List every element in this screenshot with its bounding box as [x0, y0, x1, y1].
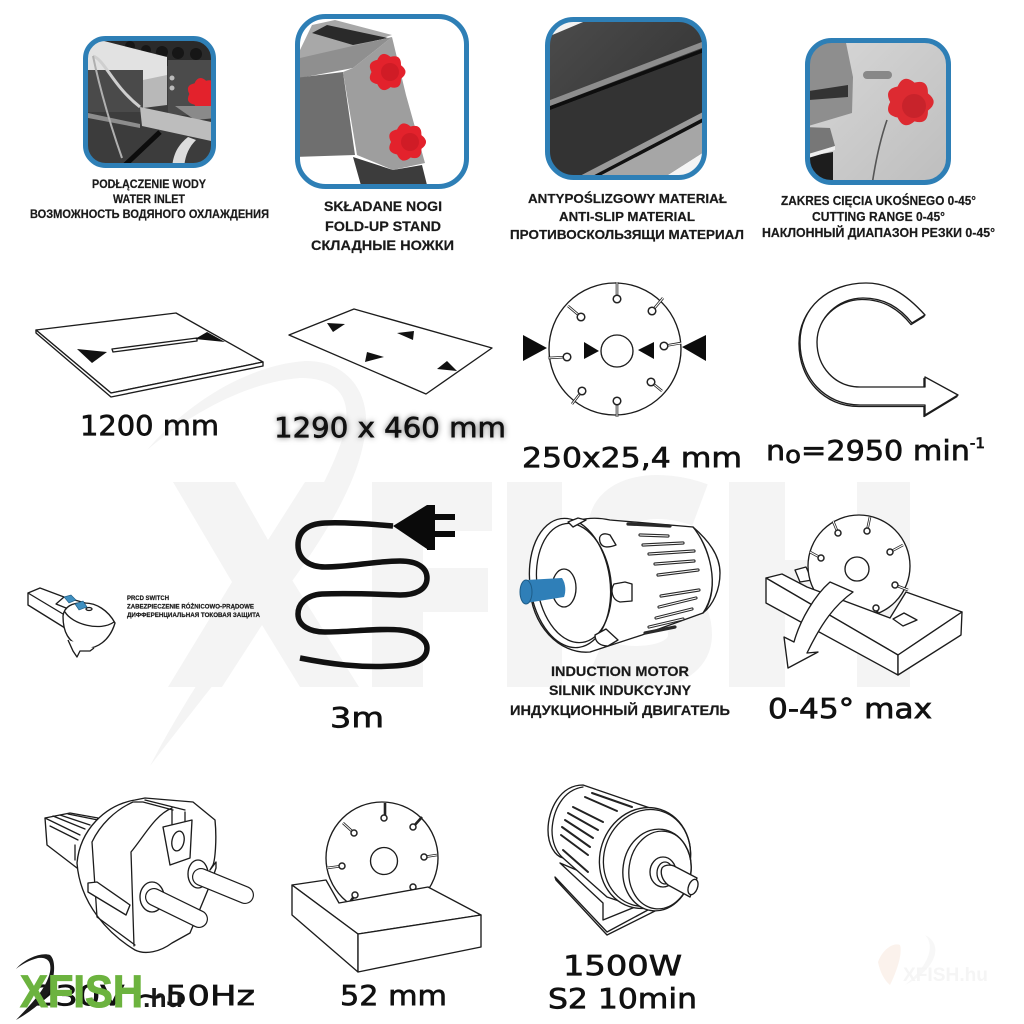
logo: XFISH green: XFISH [20, 966, 143, 1017]
logo: faint XFISH watermark: XFISH.hu [903, 965, 988, 986]
caption: water inlet [30, 179, 269, 221]
label: power rating: 1500W [563, 949, 682, 982]
caption: anti-slip material: ПРОТИВОСКОЛЬЗЯЩИ МАТЕРИАЛ [510, 227, 744, 242]
icon: cutting depth [292, 802, 481, 972]
panel: fold-up stand [295, 14, 469, 253]
icon: plug [45, 798, 245, 952]
icon: cutting length sheet [36, 313, 263, 397]
label: rotation speed: o [785, 441, 801, 469]
caption: induction motor: INDUCTION MOTOR [551, 663, 689, 679]
icon: bevel cut [766, 515, 962, 675]
label: rotation speed: -1 [970, 436, 985, 452]
caption: induction motor [510, 663, 730, 718]
icon: motor power [548, 785, 704, 935]
icon: rotation arrow [799, 283, 958, 416]
photo: water inlet [88, 41, 211, 163]
caption: cutting range: ZAKRES CIĘCIA UKOŚNEGO 0-45° [781, 193, 976, 208]
caption: fold-up stand: SKŁADANE NOGI [324, 198, 442, 214]
caption: PRCD switch: ДИФФЕРЕНЦИАЛЬНАЯ ТОКОВАЯ ЗАЩИТА [127, 612, 260, 619]
caption: PRCD switch [127, 595, 260, 619]
panel: cutting range [762, 38, 995, 240]
icon: blade diameter [523, 281, 706, 418]
icon: PRCD switch [28, 588, 115, 657]
icon: table size sheet [289, 309, 492, 394]
caption: induction motor: ИНДУКЦИОННЫЙ ДВИГАТЕЛЬ [510, 701, 730, 718]
caption: fold-up stand [311, 198, 454, 253]
caption: PRCD switch: PRCD SWITCH [127, 595, 169, 602]
label: rotation speed: =2950 min [801, 434, 970, 467]
photo: fold-up stand [300, 20, 427, 184]
panel: anti-slip material [510, 17, 744, 242]
caption: water inlet: WATER INLET [113, 194, 185, 206]
caption: fold-up stand: FOLD-UP STAND [325, 218, 441, 234]
logo: faint XFISH watermark [878, 935, 988, 986]
icon: induction motor [520, 513, 720, 653]
caption: anti-slip material: ANTYPOŚLIZGOWY MATERIAŁ [528, 191, 727, 206]
label: 1200 mm: 1200 mm [80, 409, 219, 442]
icon: power cord [298, 505, 455, 667]
label: rotation speed: n [766, 434, 784, 467]
caption: fold-up stand: СКЛАДНЫЕ НОЖКИ [311, 237, 454, 253]
label: blade size: 250x25,4 mm [522, 441, 742, 474]
label: voltage: 230V ~50Hz [33, 979, 255, 1012]
caption: cutting range: НАКЛОННЫЙ ДИАПАЗОН РЕЗКИ 0-45° [762, 225, 995, 240]
photo: anti-slip material [550, 22, 702, 175]
label: cord length: 3m [330, 701, 384, 734]
photo: cutting range [810, 43, 946, 180]
label: cut depth: 52 mm [340, 979, 447, 1012]
watermark: XFISH [147, 361, 910, 766]
logo: XFISH green: .hu [143, 983, 183, 1013]
label: power rating [548, 949, 697, 1015]
caption: water inlet: ВОЗМОЖНОСТЬ ВОДЯНОГО ОХЛАЖДЕНИЯ [30, 209, 269, 221]
caption: PRCD switch: ZABEZPIECZENIE RÓŻNICOWO-PRĄDOWE [127, 602, 255, 610]
logo: XFISH green [16, 954, 183, 1020]
label: bevel range: 0-45° max [768, 692, 932, 725]
caption: cutting range [762, 193, 995, 240]
caption: induction motor: SILNIK INDUKCYJNY [549, 682, 692, 698]
caption: anti-slip material [510, 191, 744, 242]
panel: water inlet [30, 36, 269, 221]
label: power rating: S2 10min [548, 982, 697, 1015]
caption: anti-slip material: ANTI-SLIP MATERIAL [559, 209, 695, 224]
caption: water inlet: PODŁĄCZENIE WODY [92, 179, 206, 191]
label: 1290 x 460 mm: 1290 x 460 mm [274, 411, 506, 444]
caption: cutting range: CUTTING RANGE 0-45° [812, 209, 945, 224]
